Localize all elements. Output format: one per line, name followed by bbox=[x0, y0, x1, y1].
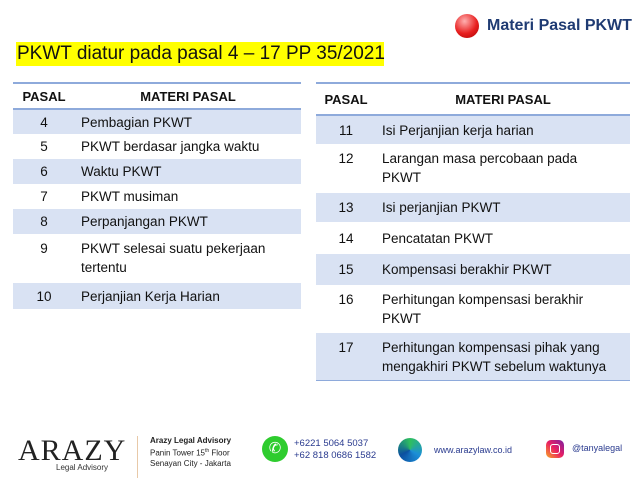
footer bbox=[18, 434, 622, 478]
table left: PKWT berdasar jangka waktu bbox=[81, 139, 259, 154]
table left: MATERI PASAL bbox=[140, 88, 236, 104]
header badge bbox=[455, 14, 632, 38]
header text: Materi Pasal PKWT bbox=[487, 17, 632, 34]
logo: Legal Advisory bbox=[56, 463, 108, 472]
table right: 16 bbox=[338, 292, 354, 307]
table right: PKWT bbox=[382, 170, 421, 185]
address: Arazy Legal Advisory bbox=[150, 436, 231, 445]
table left: PASAL bbox=[22, 88, 66, 104]
icon: phone: ✆ bbox=[269, 440, 281, 457]
table right: 12 bbox=[338, 151, 354, 166]
table left: 10 bbox=[36, 288, 52, 304]
instagram handle: @tanyalegal bbox=[572, 443, 622, 453]
website: www.arazylaw.co.id bbox=[434, 445, 512, 455]
table left: PKWT selesai suatu pekerjaan bbox=[81, 241, 265, 256]
table left: Perjanjian Kerja Harian bbox=[81, 288, 220, 304]
phone numbers: +62 818 0686 1582 bbox=[294, 450, 376, 461]
table right: mengakhiri PKWT sebelum waktunya bbox=[382, 359, 606, 374]
table right: 11 bbox=[339, 122, 353, 138]
table right: 15 bbox=[338, 262, 354, 277]
table right: Isi Perjanjian kerja harian bbox=[382, 122, 534, 138]
table right: Larangan masa percobaan pada bbox=[382, 151, 577, 166]
icon: red ball bbox=[455, 14, 479, 38]
table left: Waktu PKWT bbox=[81, 164, 162, 179]
table right bbox=[316, 82, 630, 380]
icon: instagram bbox=[546, 440, 564, 458]
table left: 4 bbox=[40, 114, 48, 130]
table right: Perhitungan kompensasi pihak yang bbox=[382, 340, 600, 355]
table left: 7 bbox=[40, 189, 48, 204]
table right: 13 bbox=[338, 200, 354, 215]
table right: Pencatatan PKWT bbox=[382, 230, 493, 246]
table left: 6 bbox=[40, 164, 48, 179]
table right: Perhitungan kompensasi berakhir bbox=[382, 292, 583, 307]
table left: 5 bbox=[40, 139, 48, 154]
address: Senayan City - Jakarta bbox=[150, 459, 231, 468]
table left: Pembagian PKWT bbox=[81, 114, 192, 130]
table right: PKWT bbox=[382, 311, 421, 326]
table right: PASAL bbox=[324, 92, 368, 106]
logo: ARAZY bbox=[18, 434, 126, 467]
icon: edge bbox=[398, 438, 422, 462]
address bbox=[150, 436, 231, 468]
table right: 17 bbox=[338, 340, 354, 355]
table left: PKWT musiman bbox=[81, 189, 178, 204]
table right: Isi perjanjian PKWT bbox=[382, 200, 501, 215]
table right: MATERI PASAL bbox=[455, 92, 551, 106]
icon: phone bbox=[262, 436, 288, 462]
table right: Kompensasi berakhir PKWT bbox=[382, 262, 552, 277]
table left bbox=[13, 82, 301, 309]
title: PKWT diatur pada pasal 4 – 17 PP 35/2021 bbox=[17, 43, 385, 64]
phone numbers: +6221 5064 5037 bbox=[294, 438, 368, 449]
address: Panin Tower 15th Floor bbox=[150, 448, 230, 458]
table left: Perpanjangan PKWT bbox=[81, 214, 208, 229]
table left: 8 bbox=[40, 214, 48, 229]
table left: tertentu bbox=[81, 260, 127, 275]
table right: 14 bbox=[338, 230, 354, 246]
phone numbers bbox=[294, 438, 376, 461]
table left: 9 bbox=[40, 241, 48, 256]
